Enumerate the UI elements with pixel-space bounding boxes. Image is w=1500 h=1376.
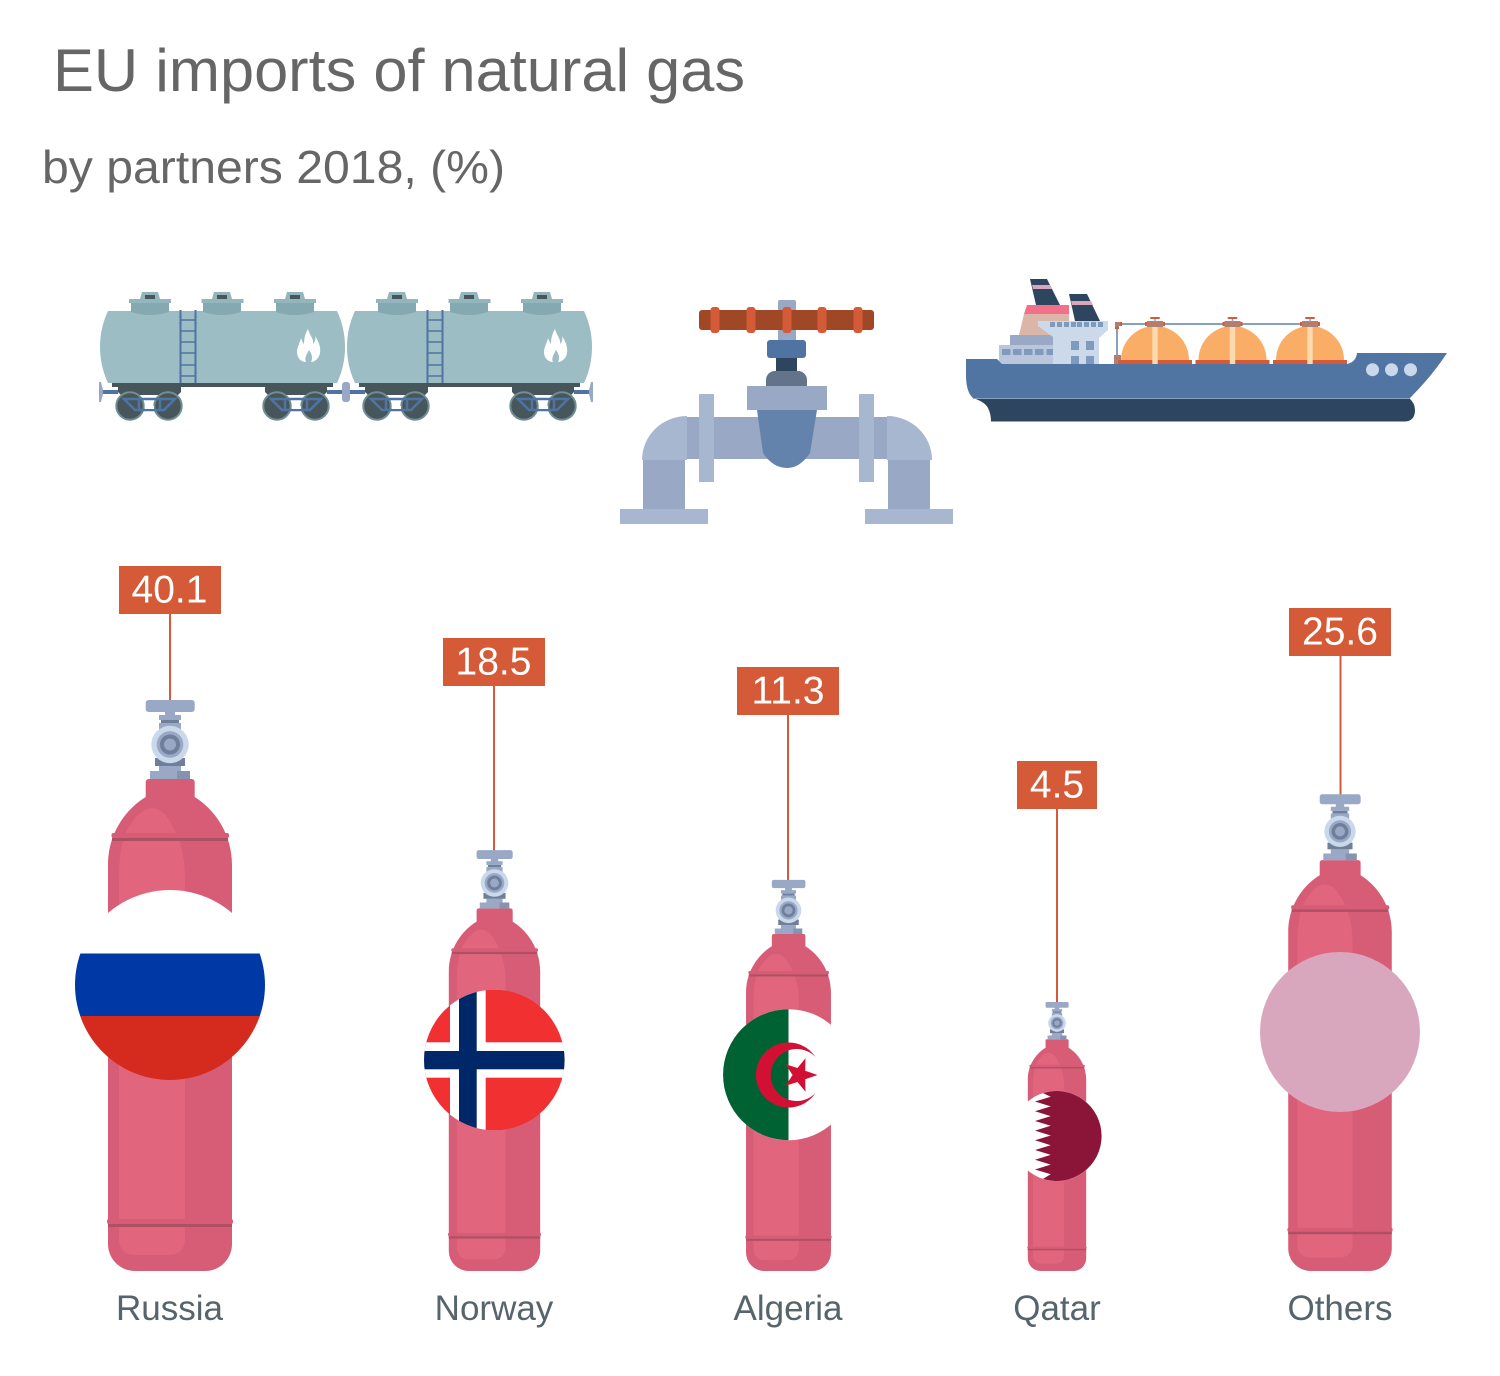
icon: pipeline valve <box>620 300 953 524</box>
value box: Russia <box>119 566 221 614</box>
cylinder body: Norway <box>448 850 541 1271</box>
cylinder: Norway <box>424 638 565 1328</box>
value box: Qatar <box>1017 761 1097 809</box>
value box: Norway <box>443 638 545 686</box>
icon: LNG tanker ship <box>966 279 1447 422</box>
value leader line: Norway <box>493 684 495 852</box>
cylinder body: Qatar <box>1027 1002 1087 1271</box>
flag: Russia <box>75 890 265 1080</box>
country label: Others: Others <box>1287 1289 1393 1328</box>
cylinder body: Algeria <box>745 880 832 1271</box>
flag: Qatar <box>1012 1091 1102 1181</box>
cylinder: Algeria <box>723 667 854 1328</box>
icon: tank train <box>99 292 593 420</box>
value leader line: Algeria <box>787 713 789 882</box>
country label: Qatar: Qatar <box>1013 1289 1101 1328</box>
flag: Algeria <box>723 1009 854 1140</box>
value box: Others: 25.6 <box>1302 610 1378 654</box>
value box: Algeria: 11.3 <box>751 670 825 712</box>
value leader line: Others <box>1340 654 1342 796</box>
cylinder body: Others <box>1287 794 1393 1271</box>
value leader line: Qatar <box>1056 807 1058 1004</box>
country label: Algeria: Algeria <box>734 1289 843 1328</box>
title: EU imports of natural gas <box>53 37 745 104</box>
flag: Others <box>1260 952 1420 1112</box>
cylinder: Others <box>1260 608 1420 1328</box>
cylinder: Qatar <box>1012 761 1102 1328</box>
subtitle: by partners 2018, (%) <box>42 141 505 193</box>
value box: Qatar: 4.5 <box>1030 764 1084 806</box>
cylinder body: Russia <box>107 700 233 1271</box>
country label: Norway: Norway <box>435 1289 554 1328</box>
cylinder: Russia <box>75 566 265 1328</box>
country label: Russia: Russia <box>116 1289 224 1328</box>
value box: Algeria <box>737 667 839 715</box>
flag: Norway <box>424 990 565 1130</box>
value leader line: Russia <box>169 612 171 702</box>
value box: Others <box>1289 608 1391 656</box>
value box: Norway: 18.5 <box>456 640 531 684</box>
value box: Russia: 40.1 <box>132 568 207 612</box>
